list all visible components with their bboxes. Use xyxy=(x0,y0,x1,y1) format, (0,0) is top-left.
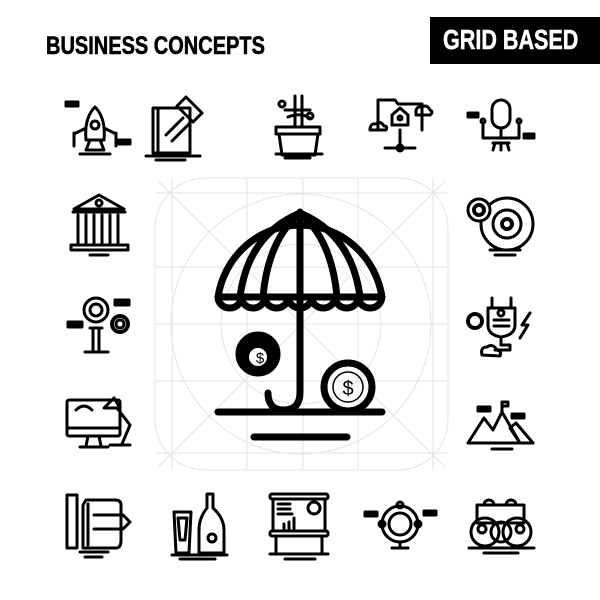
icon: ruler book pencil xyxy=(67,495,130,557)
icon: magnifier gear xyxy=(68,298,129,352)
icon: building blocks xyxy=(469,500,534,553)
icon: presentation board xyxy=(270,494,328,559)
icon: gear chart xyxy=(468,198,533,255)
main icon: umbrella with coins xyxy=(218,212,382,437)
small icons xyxy=(66,96,534,559)
text: $ xyxy=(342,378,354,400)
icon: chair xyxy=(468,100,534,150)
icon: lifebuoy xyxy=(365,502,436,548)
icon: plug xyxy=(468,298,530,356)
icon: mountains flag xyxy=(468,402,533,449)
badge: grid based: GRID BASED xyxy=(443,24,578,55)
icon: tube bottle xyxy=(172,494,227,559)
icon: monitor lamp xyxy=(67,398,130,447)
text: $ xyxy=(256,350,265,367)
icon: book with gavel xyxy=(146,97,202,160)
icon: cloud folder xyxy=(370,100,432,151)
icon: rocket xyxy=(66,102,130,154)
badge: grid based xyxy=(430,17,600,64)
icon: bank xyxy=(71,195,128,255)
icon: plant pot xyxy=(276,96,322,158)
title: BUSINESS CONCEPTS xyxy=(46,32,265,60)
grid background xyxy=(155,178,448,470)
